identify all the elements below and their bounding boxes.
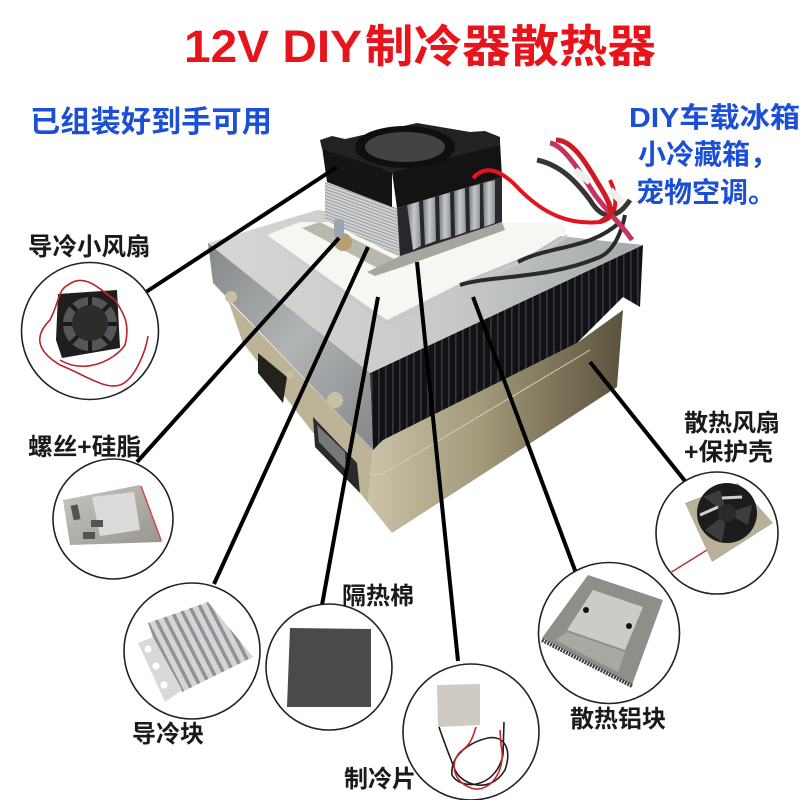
part circle: insulation	[266, 604, 392, 730]
black wires	[460, 215, 625, 285]
part circle: fan with protective shell	[656, 472, 778, 594]
part circle: screws and silicone grease	[53, 459, 173, 579]
wire bundle	[537, 140, 632, 240]
label: heat fan and shell: 散热风扇	[684, 410, 780, 437]
leader lines	[137, 167, 685, 661]
screw	[334, 219, 352, 251]
cold block fins left	[325, 182, 400, 257]
label: cold block: 导冷块	[132, 721, 204, 748]
callout: uses	[629, 102, 800, 208]
clamp strip	[367, 222, 505, 276]
heat sink fins	[370, 245, 643, 450]
label: aluminium heat sink: 散热铝块	[570, 706, 666, 733]
title: 12V DIY	[184, 21, 362, 72]
part circle: aluminium heat sink	[538, 562, 680, 704]
shell left wall	[228, 300, 373, 503]
title: 制冷器散热器	[365, 21, 656, 72]
label: heat fan and shell: +保护壳	[684, 439, 773, 466]
title	[184, 21, 656, 72]
skirt bumps	[225, 291, 343, 408]
insulation foam	[267, 222, 567, 326]
top plate	[208, 210, 643, 373]
label: small fan: 导冷小风扇	[28, 233, 150, 261]
label: peltier plate: 制冷片	[344, 766, 416, 793]
silver skirt	[208, 243, 373, 450]
label: heat fan and shell	[684, 410, 780, 466]
callout: assembled: 已组装好到手可用	[30, 106, 272, 139]
label: screws and grease: 螺丝+硅脂	[28, 434, 141, 461]
callout: uses: DIY车载冰箱	[629, 102, 800, 133]
cold block fins right	[397, 177, 502, 257]
red fan wire	[473, 170, 615, 223]
main device: assembled cooler	[208, 123, 643, 533]
part circle: peltier plate	[403, 664, 539, 800]
callout: uses: 宠物空调。	[636, 177, 776, 208]
part circle: small cooling fan	[22, 262, 158, 400]
shell front wall	[368, 310, 623, 533]
callout: uses: 小冷藏箱，	[638, 139, 778, 170]
label: insulation: 隔热棉	[342, 583, 414, 610]
clamp plate	[302, 222, 400, 272]
part circle: cold block	[124, 583, 260, 719]
small fan	[320, 123, 502, 208]
